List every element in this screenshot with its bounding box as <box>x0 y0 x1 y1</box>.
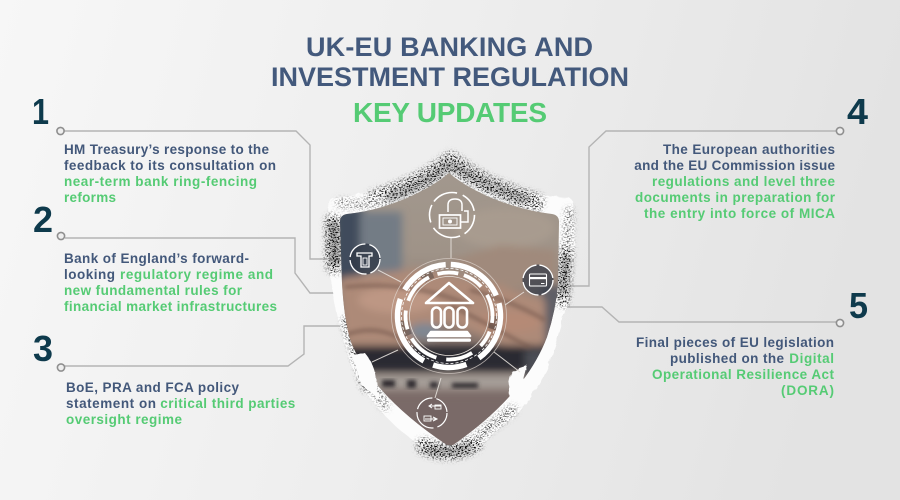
icon: payment card <box>522 264 554 296</box>
text 1: reforms <box>64 190 116 205</box>
icon: ATM <box>350 244 380 274</box>
connector lines <box>57 127 844 371</box>
text 3: oversight regime <box>66 412 182 427</box>
text 2: regulatory regime and <box>120 267 273 282</box>
text 5 <box>636 335 834 398</box>
number 1: 1 <box>32 91 49 132</box>
title: INVESTMENT REGULATION <box>271 62 629 92</box>
number 3: 3 <box>33 328 53 369</box>
text 3: critical third parties <box>160 396 295 411</box>
shield photo: hands on a laptop <box>340 173 559 445</box>
text 4 <box>634 142 836 221</box>
title <box>271 32 629 128</box>
item 5 <box>636 285 868 398</box>
text 5: Operational Resilience Act <box>652 367 834 382</box>
text 3: statement on <box>66 396 156 411</box>
text 3 <box>66 380 295 427</box>
number 2: 2 <box>33 199 53 240</box>
text 5: published on the <box>670 351 784 366</box>
central ring <box>392 258 506 374</box>
item 3 <box>33 328 295 427</box>
item 2 <box>33 199 277 314</box>
text 2: looking <box>64 267 115 282</box>
icon: bank <box>426 283 473 342</box>
spokes <box>372 238 524 398</box>
item 4 <box>634 91 868 221</box>
finger shadows <box>345 285 545 348</box>
number 4: 4 <box>847 91 868 132</box>
text 4: The European authorities <box>663 142 835 157</box>
shield white body <box>327 152 575 461</box>
text 4: regulations and level three <box>652 174 835 189</box>
text 1 <box>64 142 276 205</box>
shield dark grunge edge <box>333 161 569 452</box>
white torn patches <box>352 352 528 400</box>
text 1: HM Treasury’s response to the <box>64 142 269 157</box>
text 4: documents in preparation for <box>635 190 836 205</box>
text 2: financial market infrastructures <box>64 299 277 314</box>
title: UK-EU BANKING AND <box>306 32 593 62</box>
text 2 <box>64 251 277 314</box>
subtitle: key updates: KEY UPDATES <box>353 97 547 128</box>
shield <box>327 152 575 461</box>
number 5: 5 <box>849 285 868 326</box>
text 5: (DORA) <box>781 383 834 398</box>
text 1: near-term bank ring-fencing <box>64 174 257 189</box>
text 3: BoE, PRA and FCA policy <box>66 380 239 395</box>
text 4: and the EU Commission issue <box>634 158 835 173</box>
text 5: Final pieces of EU legislation <box>636 335 834 350</box>
text 2: new fundamental rules for <box>64 283 243 298</box>
text 4: the entry into force of MICA <box>644 206 835 221</box>
text 2: Bank of England’s forward- <box>64 251 249 266</box>
icon: lock with banknote <box>430 192 474 238</box>
shield soft grey shading <box>334 165 566 452</box>
text 5: Digital <box>789 351 834 366</box>
icon: transfer arrows <box>417 398 447 428</box>
item 1 <box>32 91 276 205</box>
text 1: feedback to its consultation on <box>64 158 276 173</box>
